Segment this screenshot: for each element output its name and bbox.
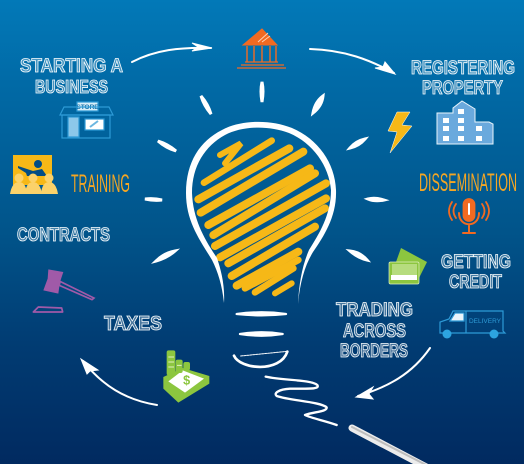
light rays — [145, 82, 384, 261]
heading: taxes: TAXES — [104, 313, 162, 335]
icon: training — [10, 155, 58, 194]
heading: starting a business — [20, 56, 123, 97]
icon: building — [437, 101, 493, 144]
text: TRAINING — [71, 170, 130, 198]
bulb base and chalk squiggle — [234, 312, 337, 425]
icon: gavel — [33, 269, 94, 312]
light bulb — [186, 122, 336, 304]
heading: getting credit: CREDIT — [449, 272, 502, 293]
bulb white outline — [186, 122, 336, 304]
heading: trading across borders: ACROSS — [343, 321, 406, 342]
heading: trading across borders — [336, 300, 413, 362]
heading: trading across borders: TRADING — [336, 300, 413, 321]
arrow: bank to registering property — [310, 49, 395, 74]
arrow: starting a business to bank — [132, 43, 212, 62]
arrow: money to contracts — [81, 359, 157, 405]
heading: contracts: CONTRACTS — [17, 225, 110, 246]
icon: credit cards — [389, 248, 427, 284]
icon: money — [163, 350, 209, 403]
heading: trading across borders: BORDERS — [340, 341, 408, 362]
icon: store: STORE — [76, 104, 99, 111]
bulb yellow scribble — [198, 141, 326, 293]
icon: delivery truck: DELIVERY — [469, 318, 502, 325]
heading: getting credit — [441, 252, 511, 293]
heading: starting a business: STARTING A — [20, 56, 123, 77]
icon: delivery truck — [440, 311, 505, 338]
heading: getting credit: GETTING — [441, 252, 511, 273]
heading: registering property — [411, 58, 515, 99]
icon: store — [60, 102, 113, 138]
heading: registering property: PROPERTY — [422, 78, 503, 99]
chalk stick — [352, 427, 432, 464]
icon: microphone — [449, 199, 489, 233]
heading: starting a business: BUSINESS — [35, 77, 108, 97]
icon: bank — [237, 29, 286, 68]
arrow: trading across borders to pen — [356, 348, 430, 399]
icon: lightning bolt — [388, 112, 412, 153]
icon: money: $ — [183, 374, 190, 388]
